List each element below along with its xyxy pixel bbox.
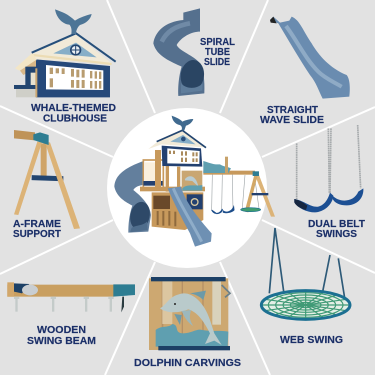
panel: web swing [261, 228, 350, 346]
panel: straight wave slide [260, 17, 350, 126]
icon: wave slide [270, 17, 350, 99]
label: dolphin carvings: DOLPHIN CARVINGS [134, 358, 242, 369]
central white circle [107, 108, 267, 268]
label: wooden swing beam: WOODEN [37, 325, 86, 336]
label: web swing: WEB SWING [280, 335, 343, 346]
label: dual belt swings [308, 219, 365, 240]
icon: full playset [114, 116, 275, 247]
icon: a-frame [14, 130, 80, 229]
icon: spiral slide [153, 8, 206, 96]
panel: central playset [107, 108, 275, 268]
label: spiral tube slide: SPIRAL [200, 37, 235, 48]
label: a-frame support: SUPPORT [13, 229, 61, 240]
label: a-frame support [13, 219, 61, 240]
panel: spiral tube slide [153, 8, 235, 96]
label: wooden swing beam [27, 325, 96, 347]
icon: web swing [261, 228, 350, 320]
icon: swings [294, 125, 363, 212]
icon: dolphin panel [149, 277, 230, 350]
label: a-frame support: A-FRAME [13, 219, 61, 230]
panel: a-frame support [13, 130, 80, 240]
label: spiral tube slide: TUBE [205, 47, 230, 58]
panel: dual belt swings [294, 125, 365, 240]
label: straight wave slide: STRAIGHT [267, 105, 318, 116]
panel: dolphin carvings [134, 277, 242, 369]
label: whale-themed clubhouse: CLUBHOUSE [43, 114, 107, 124]
label: spiral tube slide [200, 37, 235, 68]
label: wooden swing beam: SWING BEAM [27, 336, 96, 347]
label: dual belt swings: SWINGS [316, 229, 357, 240]
icon: clubhouse [14, 9, 116, 97]
label: dual belt swings: DUAL BELT [308, 219, 365, 230]
label: spiral tube slide: SLIDE [204, 57, 230, 68]
label: whale-themed clubhouse [31, 103, 116, 124]
label: whale-themed clubhouse: WHALE-THEMED [31, 103, 116, 114]
panel: wooden swing beam [7, 282, 135, 347]
panel: whale-themed clubhouse [14, 9, 116, 125]
label: straight wave slide [260, 105, 324, 126]
label: straight wave slide: WAVE SLIDE [260, 115, 324, 126]
icon: beam [7, 282, 135, 312]
